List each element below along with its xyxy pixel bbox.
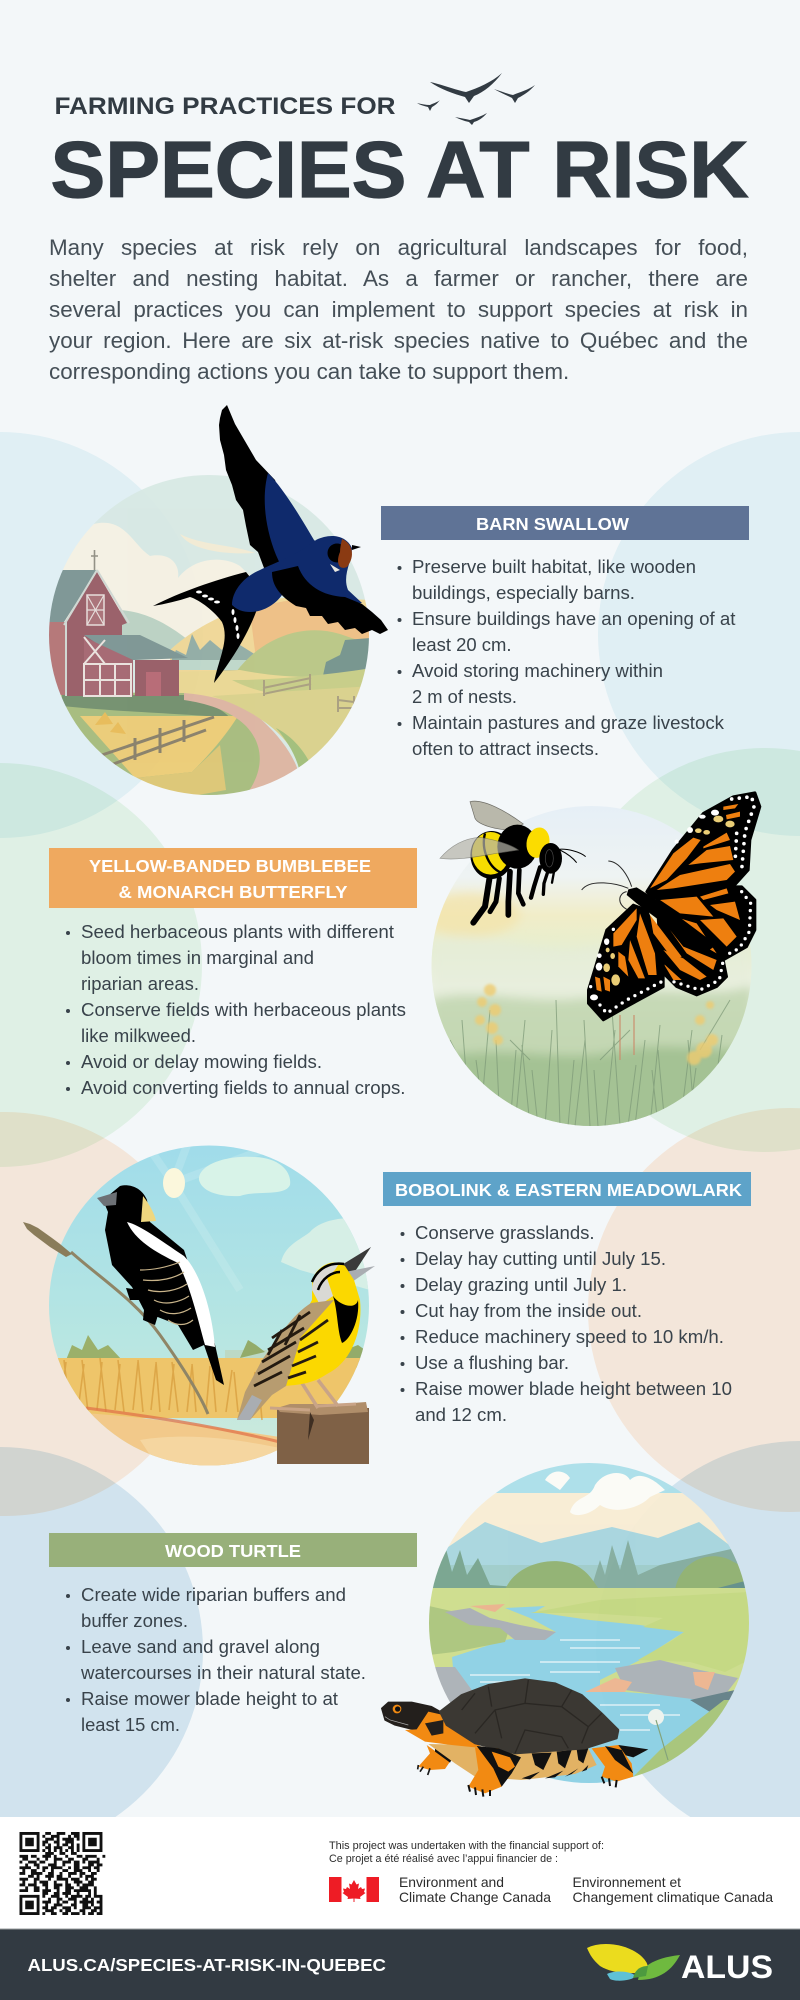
panel: bobolink and meadowlark bbox=[383, 1172, 751, 1425]
title: species at risk: SPECIES AT RISK bbox=[50, 125, 749, 214]
text block: introduction: Many species at risk rely on agricultural landscapes for food, bbox=[49, 235, 748, 260]
text block: introduction: several practices you can implement to support species at risk in bbox=[49, 297, 748, 322]
illustration: bobolink on grass stem bbox=[23, 1185, 224, 1414]
list: barn swallow actions: 2 m of nests. bbox=[412, 687, 517, 707]
heading bar: bumblebee and monarch bbox=[49, 848, 417, 908]
text: department name: Environnement et bbox=[572, 1874, 681, 1890]
list: pollinator actions: Conserve fields with herbaceous plants bbox=[81, 1000, 406, 1020]
list: wood turtle actions: least 15 cm. bbox=[81, 1715, 180, 1735]
list: barn swallow actions bbox=[398, 557, 736, 759]
scene: wildflower meadow bbox=[420, 806, 752, 1127]
heading bar: wood turtle: WOOD TURTLE bbox=[165, 1541, 301, 1561]
heading bar: wood turtle bbox=[49, 1533, 417, 1567]
scene: barn landscape bbox=[49, 475, 372, 800]
list: pollinator actions bbox=[66, 922, 406, 1098]
heading bar: bumblebee and monarch: YELLOW-BANDED BUMBLEBEE bbox=[89, 856, 371, 876]
list: grassland bird actions: Cut hay from the inside out. bbox=[415, 1301, 642, 1321]
background circles bbox=[0, 432, 800, 1817]
heading: farming practices for: FARMING PRACTICES FOR bbox=[54, 93, 396, 120]
list: wood turtle actions: watercourses in their natural state. bbox=[80, 1663, 366, 1683]
footer: sponsor band bbox=[0, 1817, 800, 1929]
heading bar: bumblebee and monarch: & MONARCH BUTTERFLY bbox=[118, 882, 348, 902]
heading bar: barn swallow: BARN SWALLOW bbox=[476, 514, 629, 534]
panel: barn swallow bbox=[381, 506, 749, 759]
illustration: eastern meadowlark on post bbox=[237, 1247, 375, 1464]
list: wood turtle actions: Create wide riparian buffers and bbox=[81, 1585, 346, 1605]
text: department name bbox=[399, 1874, 773, 1905]
text: funding statement: Ce projet a été réalisé avec l’appui financier de : bbox=[329, 1853, 558, 1865]
list: pollinator actions: like milkweed. bbox=[81, 1026, 196, 1046]
list: wood turtle actions: buffer zones. bbox=[81, 1611, 188, 1631]
list: barn swallow actions: Preserve built habitat, like wooden bbox=[412, 557, 696, 577]
list: barn swallow actions: Maintain pastures and graze livestock bbox=[412, 713, 725, 733]
list: wood turtle actions bbox=[66, 1585, 366, 1735]
heading bar: bobolink and meadowlark: BOBOLINK & EASTERN MEADOWLARK bbox=[395, 1180, 742, 1200]
list: grassland bird actions: Delay grazing until July 1. bbox=[415, 1275, 627, 1295]
list: wood turtle actions: Leave sand and gravel along bbox=[81, 1637, 320, 1657]
list: barn swallow actions: least 20 cm. bbox=[412, 635, 512, 655]
list: barn swallow actions: Avoid storing machinery within bbox=[412, 661, 663, 681]
list: grassland bird actions: Use a flushing bar. bbox=[415, 1353, 569, 1373]
text block: introduction bbox=[49, 235, 748, 384]
list: barn swallow actions: Ensure buildings have an opening of at bbox=[412, 609, 736, 629]
list: wood turtle actions: Raise mower blade height to at bbox=[81, 1689, 338, 1709]
text block: introduction: corresponding actions you can take to support them. bbox=[49, 359, 569, 384]
icon: flying birds bbox=[417, 73, 535, 125]
list: barn swallow actions: often to attract insects. bbox=[412, 739, 599, 759]
list: barn swallow actions: buildings, especially barns. bbox=[412, 583, 635, 603]
panel: wood turtle bbox=[49, 1533, 417, 1735]
list: pollinator actions: Avoid or delay mowing fields. bbox=[81, 1052, 322, 1072]
text: funding statement bbox=[329, 1840, 604, 1865]
panel: bumblebee and monarch bbox=[49, 848, 417, 1098]
icon: QR code bbox=[20, 1832, 105, 1915]
list: pollinator actions: Seed herbaceous plants with different bbox=[81, 922, 394, 942]
scene: river landscape bbox=[429, 1463, 749, 1795]
heading bar: bobolink and meadowlark bbox=[383, 1172, 751, 1206]
heading bar: barn swallow bbox=[381, 506, 749, 540]
text: department name: Climate Change Canada bbox=[399, 1889, 551, 1905]
list: pollinator actions: riparian areas. bbox=[81, 974, 199, 994]
logo: ALUS: ALUS bbox=[681, 1949, 773, 1985]
list: grassland bird actions: Conserve grasslands. bbox=[415, 1223, 595, 1243]
illustration: monarch butterfly bbox=[582, 793, 760, 1020]
text: funding statement: This project was undertaken with the financial support of: bbox=[329, 1840, 604, 1852]
logo: ALUS bbox=[587, 1944, 773, 1985]
list: grassland bird actions: Raise mower blade height between 10 bbox=[415, 1379, 732, 1399]
illustration: wood turtle bbox=[382, 1679, 648, 1797]
list: pollinator actions: Avoid converting fields to annual crops. bbox=[81, 1078, 406, 1098]
list: grassland bird actions: Reduce machinery speed to 10 km/h. bbox=[415, 1327, 724, 1347]
text block: introduction: your region. Here are six at-risk species native to Québec and the bbox=[49, 328, 748, 353]
list: grassland bird actions bbox=[400, 1223, 732, 1425]
list: pollinator actions: bloom times in marginal and bbox=[81, 948, 314, 968]
list: grassland bird actions: Delay hay cutting until July 15. bbox=[415, 1249, 666, 1269]
text: department name: Changement climatique Canada bbox=[572, 1889, 773, 1905]
scene: wheat field bbox=[49, 1146, 369, 1466]
text block: introduction: shelter and nesting habitat. As a farmer or rancher, there are bbox=[49, 266, 748, 291]
text: website URL: ALUS.CA/SPECIES-AT-RISK-IN-QUEBEC bbox=[28, 1955, 386, 1975]
illustration: yellow-banded bumblebee bbox=[440, 801, 586, 923]
list: grassland bird actions: and 12 cm. bbox=[415, 1405, 507, 1425]
text: department name: Environment and bbox=[399, 1874, 504, 1890]
illustration: barn swallow bbox=[153, 405, 388, 683]
footer: URL and logo band bbox=[0, 1928, 800, 2000]
icon: Canadian flag bbox=[329, 1877, 379, 1902]
